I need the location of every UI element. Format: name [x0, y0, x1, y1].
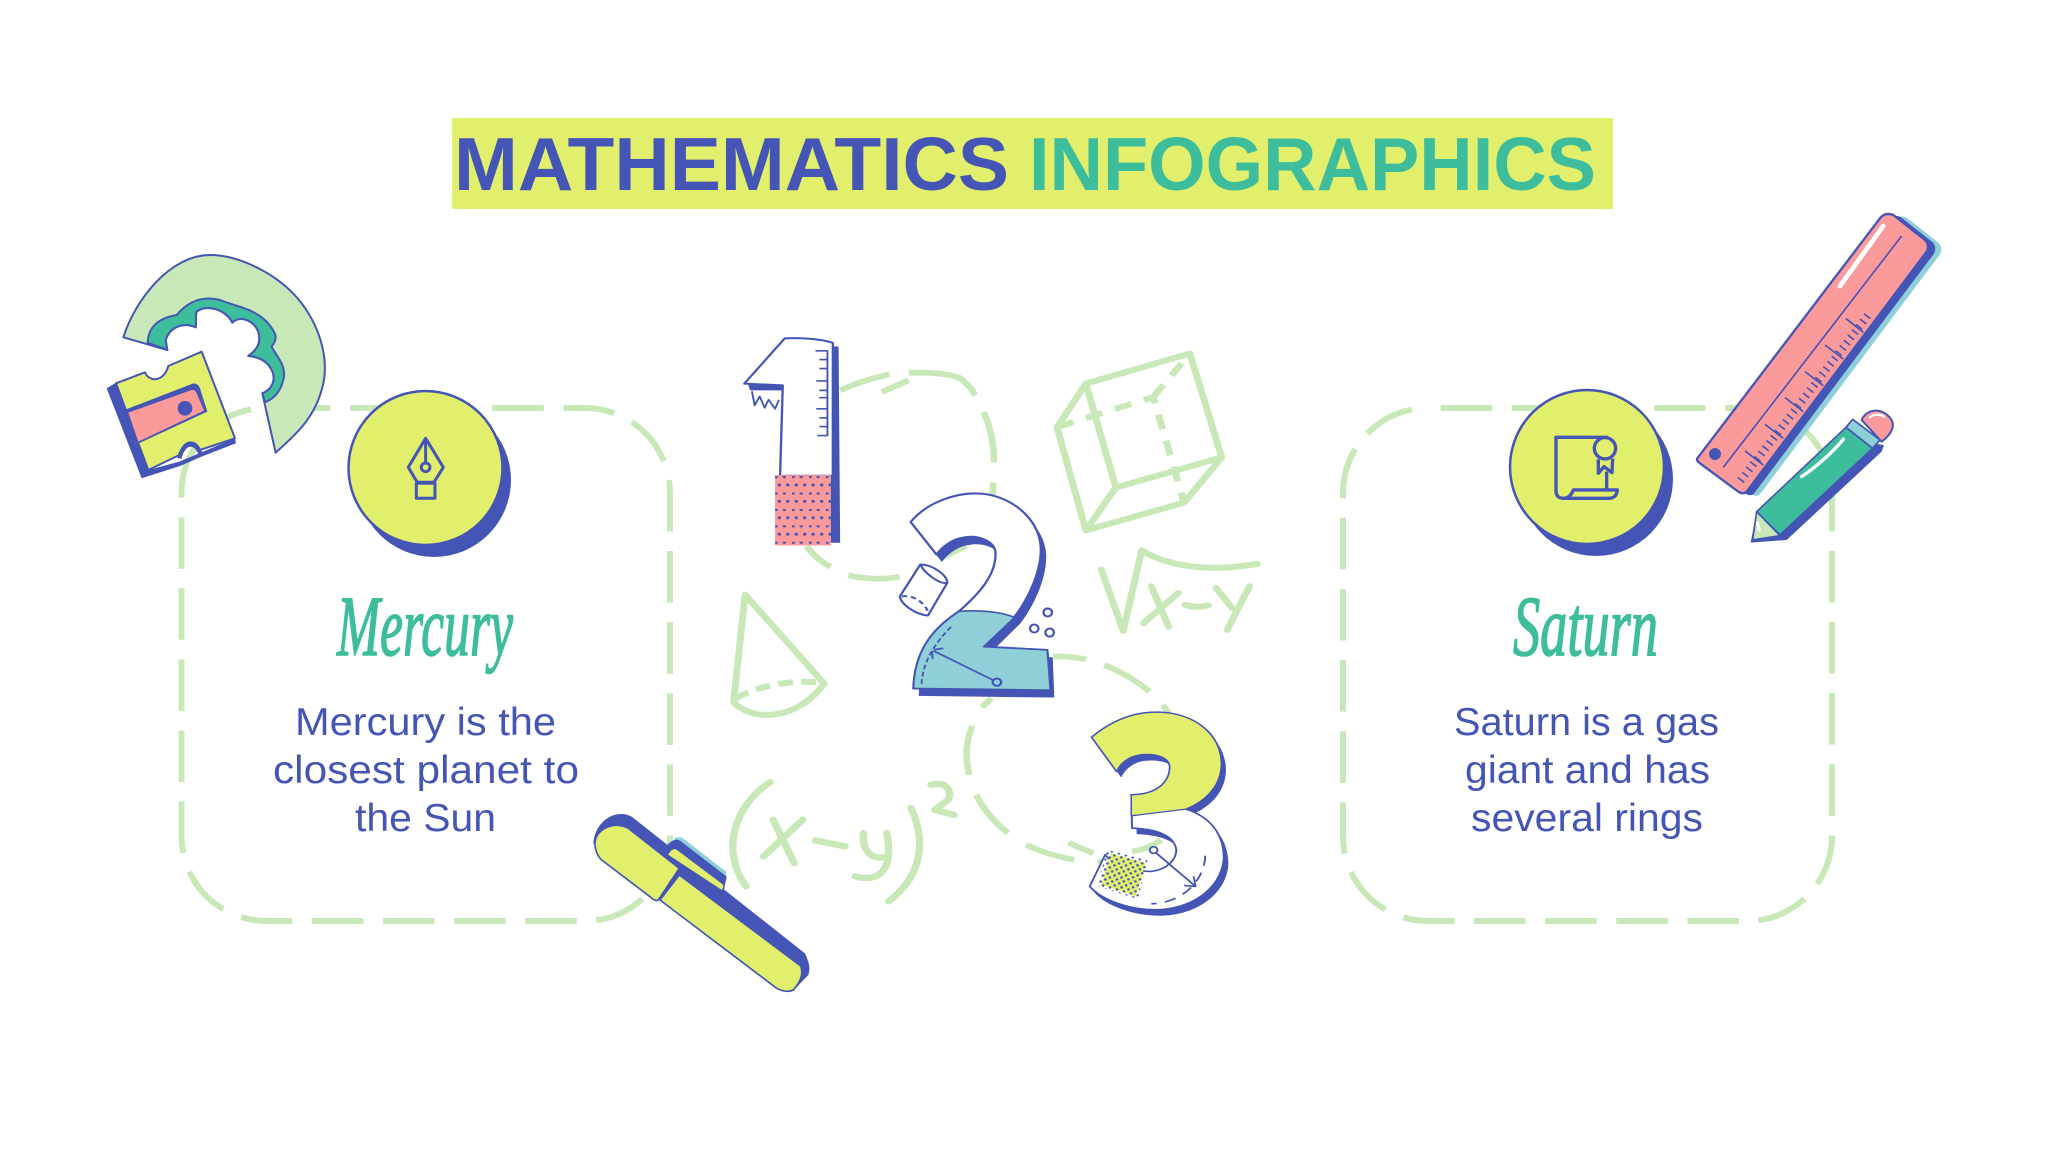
pencil band [1846, 419, 1880, 448]
sharpener window [124, 383, 207, 444]
title banner [452, 118, 1613, 209]
number 2 body [911, 493, 1050, 690]
number 2 [911, 493, 1054, 698]
number 3 dotted patch [1101, 853, 1146, 896]
formula: x minus y squared [733, 782, 954, 901]
text block: mercury description [273, 701, 579, 840]
marker clip [673, 837, 727, 880]
panel: mercury [182, 391, 670, 921]
small bubbles [1030, 608, 1054, 637]
shavings inner [148, 299, 284, 402]
text block: saturn description: giant and has [1465, 749, 1710, 792]
text block: mercury description: Mercury is the [295, 701, 556, 744]
dashed frame: saturn [1343, 408, 1832, 921]
ruler hole [1709, 448, 1721, 460]
icon: ruler [1697, 214, 1941, 496]
number 1 body [744, 338, 833, 476]
shavings outer [123, 255, 325, 453]
number 1 [744, 338, 840, 545]
pencil shadow [1751, 443, 1884, 543]
marker barrel [660, 875, 802, 991]
marker cap [595, 825, 679, 900]
number 2 shadow [916, 501, 1054, 698]
number 1 ruler ticks [752, 351, 827, 436]
pencil tip [1753, 512, 1780, 540]
icon: scroll with medal [1556, 437, 1617, 498]
icon: pen nib [408, 438, 443, 498]
dashed connector: two to three [967, 656, 1169, 861]
marker shadow [593, 814, 809, 991]
sharpener body [116, 352, 235, 470]
circle badge: saturn [1510, 390, 1673, 556]
pencil eraser [1862, 411, 1893, 442]
circle badge: mercury [348, 391, 511, 557]
shape: cylinder [900, 565, 947, 615]
text block: mercury description: the Sun [355, 797, 496, 840]
dashed frame: mercury [182, 408, 670, 921]
number 3 shadow [1094, 718, 1228, 916]
formula: square root of x minus y [1101, 550, 1257, 631]
heading: saturn: Saturn [1513, 578, 1658, 674]
text block: saturn description [1454, 701, 1719, 840]
shape: cube [1057, 354, 1222, 530]
title word: mathematics: MATHEMATICS [454, 122, 1009, 206]
sharpener notch edge [179, 445, 201, 458]
number 1 shadow [748, 346, 840, 543]
pencil body [1757, 427, 1873, 535]
shape: cone [734, 595, 824, 715]
number 3 body [1090, 712, 1224, 910]
title word: infographics: INFOGRAPHICS [1029, 122, 1596, 206]
panel: saturn [1343, 390, 1832, 921]
ruler body [1697, 214, 1928, 493]
text block: mercury description: closest planet to [273, 749, 579, 792]
number 2 teal base [913, 611, 1050, 690]
number 3 yellow top [1092, 712, 1221, 816]
text block: saturn description: several rings [1471, 797, 1703, 840]
sharpener shadow [107, 383, 236, 478]
number 1 dotted pink base [775, 475, 831, 545]
heading: mercury: Mercury [336, 578, 513, 674]
icon: pencil sharpener with shavings [107, 255, 325, 478]
icon: marker [593, 814, 809, 991]
dashed connector: one to two [807, 373, 994, 579]
number 2 arrow and arc [921, 625, 997, 685]
ruler highlight [1840, 226, 1883, 286]
pencil highlight [1802, 439, 1843, 477]
text block: saturn description: Saturn is a gas [1454, 701, 1719, 744]
number 3 [1090, 712, 1228, 916]
ruler cyan shadow [1710, 217, 1941, 496]
number 3 arrow and arc [1155, 852, 1196, 886]
icon: pencil [1751, 411, 1893, 543]
ruler markings [1723, 236, 1902, 467]
ruler blue shadow [1704, 216, 1935, 495]
title [452, 118, 1613, 209]
